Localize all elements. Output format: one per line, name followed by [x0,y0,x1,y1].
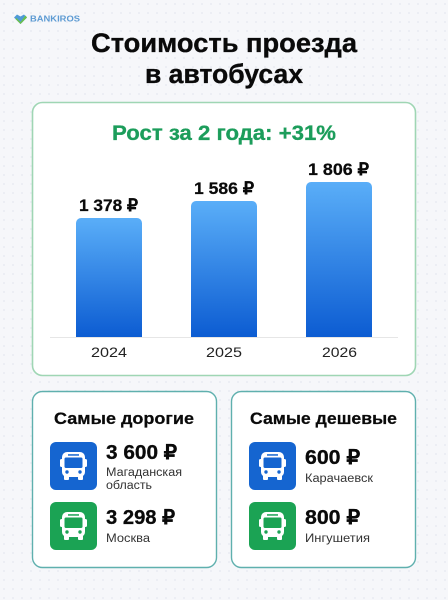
price: Moscow: 3 298 ₽ [106,507,175,529]
panel: most expensive [32,392,216,568]
bar 2026 [306,160,372,360]
price: Ingushetia [305,507,370,545]
bar 2024: 1 378 ₽ [79,196,138,215]
bar 2026: 1 806 ₽ [308,160,369,179]
price: Magadan: область [106,480,152,492]
bar 2025 [191,179,257,360]
bar 2026: 2026 [322,344,357,360]
icon: blue bus [50,442,97,490]
heading: cheapest: Самые дешевые [250,410,397,428]
icon: green bus [50,502,97,550]
price: Karachaevsk [305,447,374,485]
panel: cheapest [232,392,416,568]
icon: blue bus [249,442,296,490]
price: Karachaevsk: Карачаевск [305,473,374,485]
title: Стоимость проезда [91,28,358,58]
bar 2024 [76,196,142,360]
logo: Bankiros [14,14,81,24]
logo: Bankiros: BANKIROS [30,14,81,24]
icon: green bus [249,502,296,550]
heading: most expensive: Самые дорогие [54,410,194,428]
panel: growth bar chart [32,102,416,376]
price: Magadan: 3 600 ₽ [106,442,177,464]
title: в автобусах [145,59,303,89]
price: Moscow: Москва [106,533,151,545]
price: Magadan [106,442,182,492]
title [91,28,358,89]
axis line [50,337,398,338]
bar 2025: 2025 [206,344,242,360]
price: Karachaevsk: 600 ₽ [305,447,360,469]
price: Moscow [106,507,175,545]
growth heading: Рост за 2 года: +31% [112,122,336,145]
price: Magadan: Магаданская [106,467,182,479]
bar 2025: 1 586 ₽ [194,179,254,198]
bar 2024: 2024 [91,344,127,360]
price: Ingushetia: Ингушетия [305,533,370,545]
price: Ingushetia: 800 ₽ [305,507,360,529]
